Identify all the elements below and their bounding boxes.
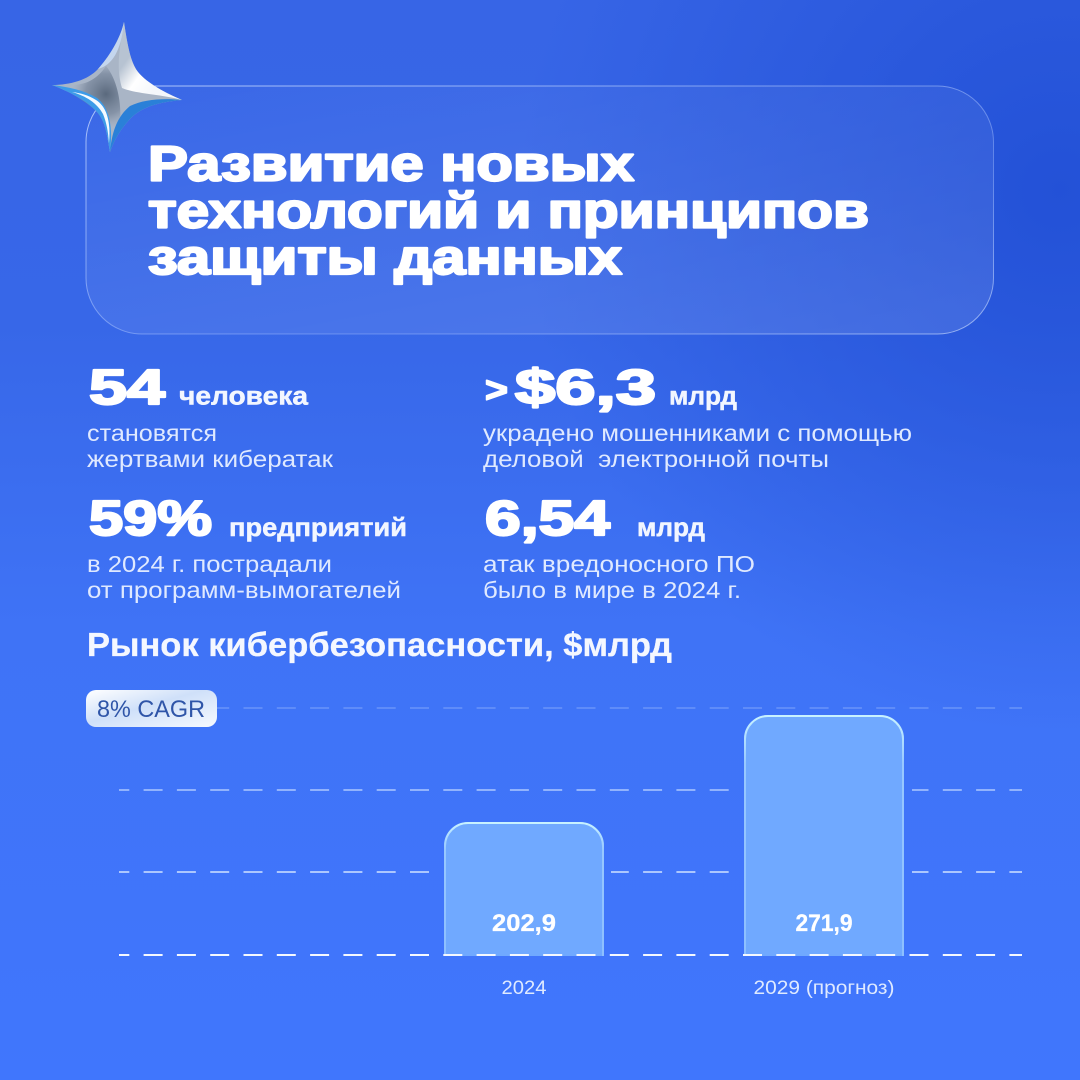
- bar chart: [119, 708, 1022, 999]
- bar: 2029 forecast: 2029 (прогноз): [754, 978, 894, 999]
- title: [148, 138, 869, 285]
- stat: 6.54 billion attacks: 6,54: [485, 492, 610, 546]
- stat: 6.3 billion dollars: украдено мошенниками с помощью: [483, 420, 912, 446]
- bar: 2029 forecast: 271,9: [796, 910, 852, 937]
- panel: title card: [86, 86, 994, 334]
- stat: 59 percent of companies: 59%: [89, 492, 212, 546]
- stat: 59 percent of companies: в 2024 г. пострадали: [87, 551, 332, 577]
- stat: 54 people: человека: [179, 380, 309, 410]
- title: защиты данных: [148, 231, 622, 285]
- stat: 6.3 billion dollars: [483, 361, 912, 472]
- stat: 6.54 billion attacks: [483, 492, 755, 603]
- badge: 8% CAGR: 8% CAGR: [97, 696, 205, 723]
- bar: 2024: 2024: [502, 978, 547, 999]
- stat: 59 percent of companies: предприятий: [229, 512, 407, 542]
- icon: metallic four-point star: [52, 22, 182, 152]
- stat: 54 people: [87, 361, 334, 472]
- stat: 54 people: 54: [89, 361, 165, 415]
- stat: 54 people: становятся: [87, 420, 217, 446]
- chart heading: Рынок кибербезопасности, $млрд: [87, 626, 672, 663]
- stat: 59 percent of companies: [87, 492, 407, 603]
- stat: 54 people: жертвами кибератак: [87, 446, 334, 472]
- stat: 6.3 billion dollars: млрд: [669, 380, 737, 410]
- title: технологий и принципов: [148, 184, 869, 238]
- stat: 6.54 billion attacks: млрд: [637, 512, 705, 542]
- stat: 6.3 billion dollars: деловой электронной почты: [483, 446, 829, 472]
- bar: 2029 forecast: [744, 715, 904, 999]
- stat: 59 percent of companies: от программ-вымогателей: [87, 577, 401, 603]
- stat: 6.3 billion dollars: $6,3: [515, 361, 656, 415]
- stat: 6.3 billion dollars: >: [485, 369, 508, 410]
- bar: 2024: 202,9: [492, 910, 556, 937]
- badge: 8% CAGR: [86, 690, 217, 727]
- stat: 6.54 billion attacks: было в мире в 2024 г.: [483, 577, 741, 603]
- stat: 6.54 billion attacks: атак вредоносного ПО: [483, 551, 755, 577]
- bar: 2024: [444, 822, 604, 999]
- title: Развитие новых: [148, 138, 634, 192]
